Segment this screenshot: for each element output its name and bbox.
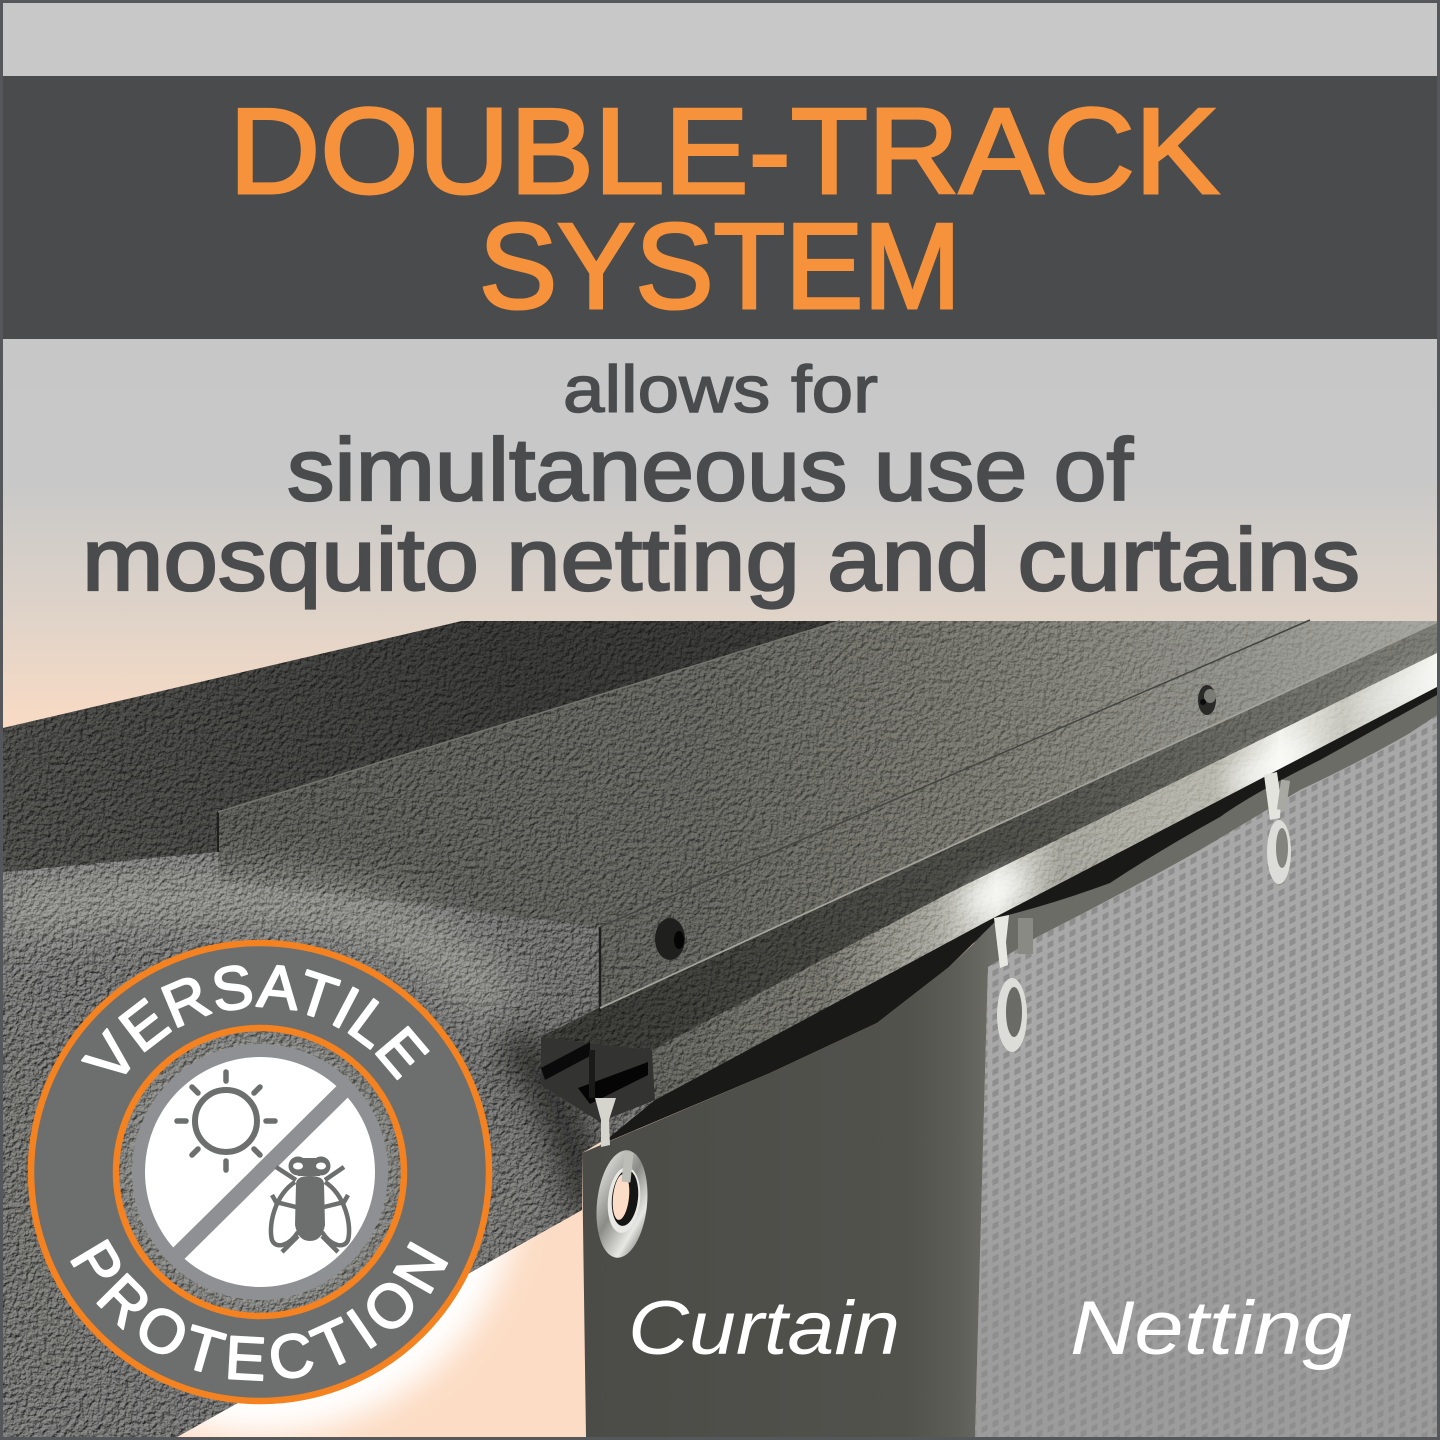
badge text: versatile: VERSATILE bbox=[81, 964, 430, 1080]
title line 2: SYSTEM bbox=[479, 198, 961, 334]
prohibition symbol bbox=[138, 1050, 382, 1294]
track end opening bbox=[541, 1037, 655, 1122]
hook and grommet: netting left bbox=[994, 915, 1033, 1052]
subtitle line 2: simultaneous use of bbox=[287, 420, 1134, 519]
screw: rear bbox=[1198, 685, 1216, 715]
subtitle line 3: mosquito netting and curtains bbox=[82, 510, 1360, 609]
upper dark face bbox=[3, 621, 840, 872]
badge: versatile protection bbox=[28, 940, 492, 1404]
rail highlights bbox=[959, 664, 1440, 919]
subtitle line 1: allows for bbox=[563, 352, 878, 426]
texture overlay bbox=[0, 620, 1440, 1440]
subtitle text bbox=[82, 352, 1360, 609]
label: curtain: Curtain bbox=[628, 1286, 900, 1371]
plate seam lines bbox=[218, 620, 1437, 1012]
hook and grommet: curtain bbox=[591, 1098, 653, 1260]
badge text: protection: PROTECTION bbox=[70, 1239, 448, 1382]
hook and grommet: netting right bbox=[1264, 772, 1291, 884]
white halo behind badge bbox=[0, 910, 522, 1434]
olive band behind netting bbox=[980, 690, 1437, 975]
top grey band bbox=[0, 0, 1440, 76]
vertical plate bbox=[218, 621, 1437, 1030]
title banner bbox=[0, 76, 1440, 339]
label: netting: Netting bbox=[1070, 1286, 1352, 1371]
screw: front bbox=[655, 918, 685, 960]
metal track housing bbox=[0, 620, 1440, 1440]
shadow by curtain bbox=[510, 1040, 590, 1210]
background gradient bbox=[0, 339, 1440, 1440]
icon: sun bbox=[177, 1072, 275, 1170]
wall highlights bbox=[0, 897, 530, 1380]
title line 1: DOUBLE-TRACK bbox=[229, 83, 1219, 219]
black rail underside bbox=[600, 687, 1437, 1145]
wall base bbox=[3, 621, 1437, 1437]
rail front band bbox=[652, 653, 1437, 1100]
badge outer ring bbox=[28, 940, 492, 1404]
netting panel bbox=[970, 690, 1440, 1440]
curtain panel bbox=[582, 927, 991, 1437]
icon: fly bbox=[271, 1156, 349, 1252]
rail top face bbox=[541, 622, 1437, 1050]
